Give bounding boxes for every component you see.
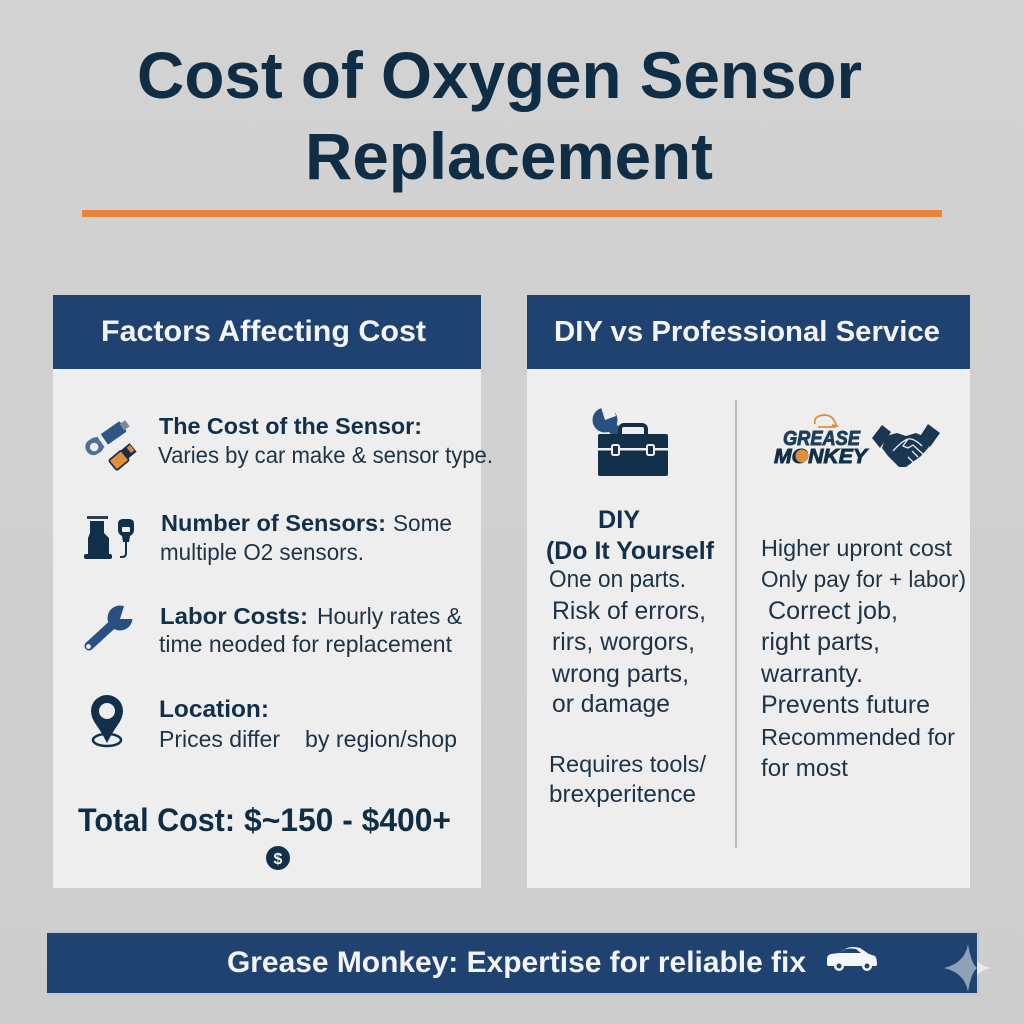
- panel: DIY vs professional service: [527, 295, 970, 888]
- text: DIY column: One on parts.: [549, 566, 686, 593]
- text: professional column: right parts,: [761, 628, 880, 656]
- title: Cost of Oxygen Sensor: [137, 39, 862, 112]
- icon: handshake: [872, 424, 940, 467]
- text: labor costs: Labor Costs:: [160, 603, 308, 629]
- text: cost of the sensor: Varies by car make & sensor type.: [158, 442, 493, 468]
- text: location: by region/shop: [305, 726, 457, 752]
- decorative sparkle: [944, 944, 992, 992]
- panel header: DIY vs professional: DIY vs Professional Service: [554, 316, 940, 348]
- text: DIY column: (Do It Yourself: [546, 538, 715, 565]
- text: DIY column: wrong parts,: [551, 660, 689, 688]
- total cost: $~150 - $400+: [244, 802, 451, 838]
- logo: Grease Monkey: [774, 415, 869, 468]
- total cost: Total Cost:: [78, 802, 235, 838]
- icon: sensor connector: [82, 416, 138, 470]
- text: labor costs: Hourly rates &: [317, 603, 462, 629]
- total cost: [78, 802, 451, 838]
- text: professional column: for most: [761, 755, 848, 782]
- column divider: [735, 400, 737, 848]
- title: Replacement: [305, 120, 713, 193]
- logo: Grease Monkey: MONKEY: [774, 446, 869, 468]
- icon: toolbox with wrench: [592, 404, 668, 476]
- text: DIY column: Risk of errors,: [552, 598, 706, 625]
- text: number of sensors: multiple O2 sensors.: [160, 539, 364, 565]
- text: number of sensors: [160, 510, 452, 565]
- panel header: DIY vs professional: [527, 295, 970, 369]
- text: labor costs: time neoded for replacement: [159, 631, 453, 657]
- text: professional column: Recommended for: [761, 724, 955, 750]
- icon: location pin: [91, 695, 123, 746]
- text: professional column: Higher upront cost: [761, 535, 952, 561]
- icon: car: [827, 947, 877, 971]
- footer text: Grease Monkey: Expertise for reliable fix: [227, 946, 806, 979]
- icon: wrench: [86, 603, 137, 649]
- text: cost of the sensor: The Cost of the Sensor:: [159, 413, 422, 439]
- text: DIY column: Requires tools/: [549, 751, 706, 777]
- text: DIY column: [546, 506, 715, 808]
- text: location: Prices differ: [159, 726, 280, 752]
- panel: factors affecting cost: [53, 295, 493, 888]
- text: professional column: Only pay for + labor): [761, 566, 966, 592]
- text: labor costs: [159, 603, 462, 657]
- title underline: [82, 210, 942, 217]
- panel header: factors: Factors Affecting Cost: [101, 315, 426, 348]
- text: DIY column: rirs, worgors,: [552, 629, 695, 656]
- text: professional column: Correct job,: [768, 597, 898, 625]
- text: number of sensors: Some: [393, 510, 452, 536]
- text: professional column: Prevents future: [761, 691, 930, 719]
- panel header: factors: [53, 295, 481, 369]
- text: DIY column: or damage: [552, 691, 670, 718]
- footer banner: [47, 930, 992, 996]
- logo: Grease Monkey: GREASE: [783, 428, 861, 450]
- text: location: Location:: [159, 696, 269, 723]
- text: location: [159, 696, 457, 752]
- text: number of sensors: Number of Sensors:: [161, 510, 386, 536]
- icon: oxygen sensor and plug: [84, 516, 134, 559]
- text: professional column: [760, 535, 966, 782]
- text: professional column: warranty.: [760, 661, 863, 688]
- text: DIY column: brexperitence: [549, 781, 696, 808]
- text: DIY column: DIY: [598, 506, 640, 534]
- icon: dollar coin: $: [274, 851, 283, 868]
- icon: dollar coin: [266, 846, 290, 870]
- text: cost of the sensor: [158, 413, 493, 468]
- title: [137, 39, 862, 193]
